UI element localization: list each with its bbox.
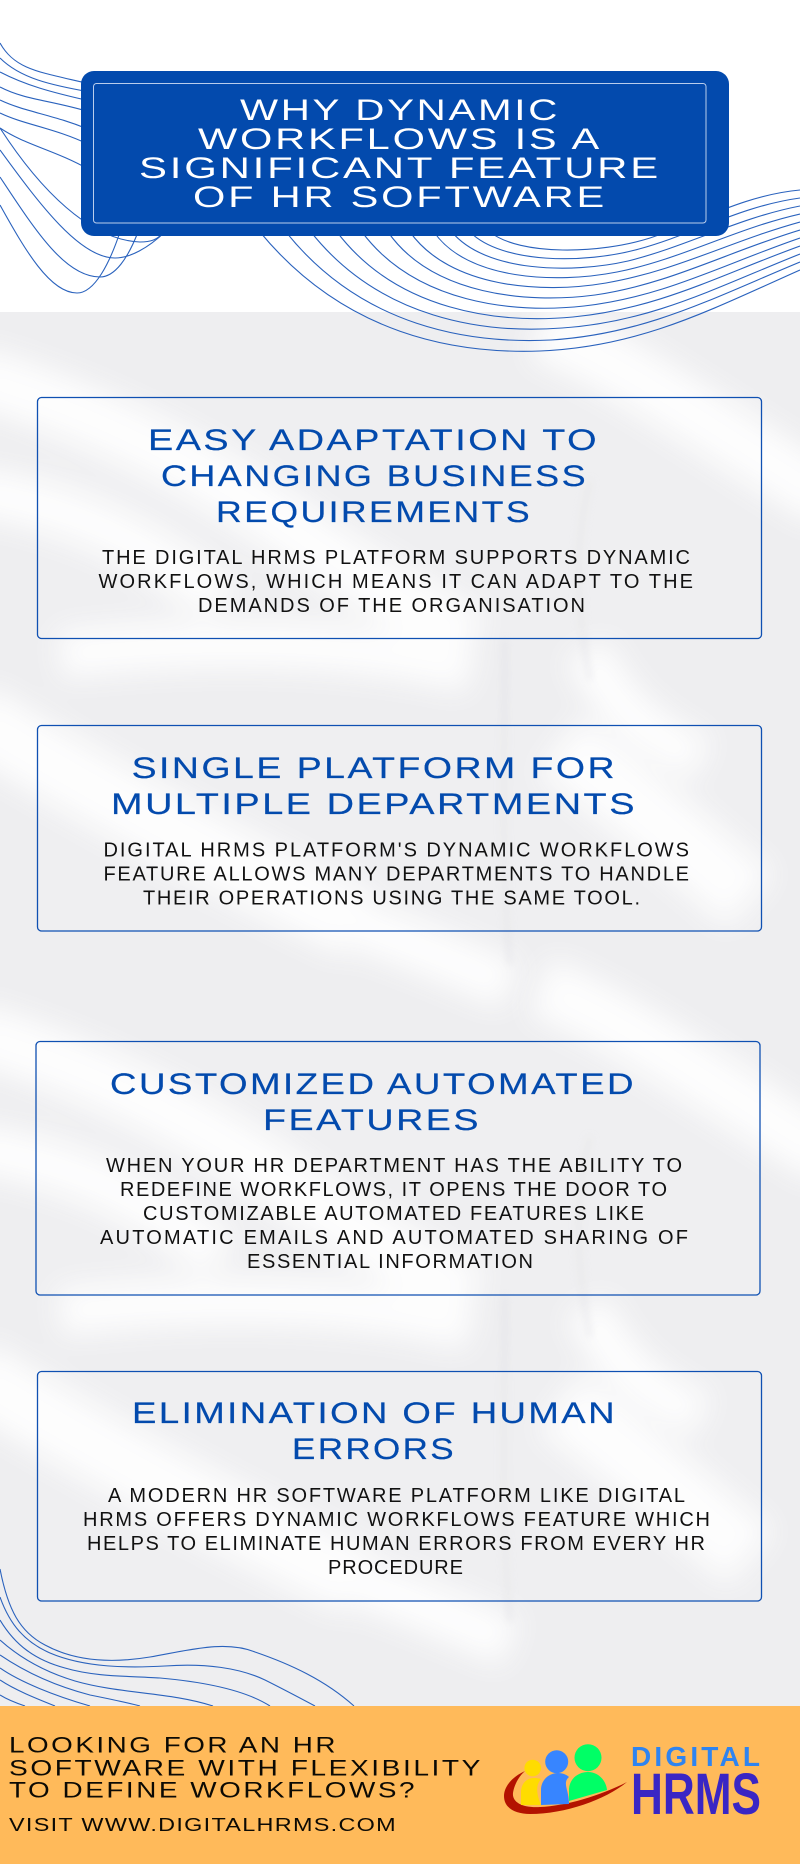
- body text: elimination of human errors: PROCEDURE: [328, 1557, 463, 1579]
- body text: elimination of human errors: [83, 1485, 710, 1579]
- heading: easy adaptation: EASY ADAPTATION TO: [148, 424, 599, 457]
- panel: elimination of human errors: [38, 1372, 762, 1601]
- heading: easy adaptation: REQUIREMENTS: [216, 496, 532, 529]
- body text: customized automated features: [100, 1155, 688, 1273]
- heading: elimination of human errors: ELIMINATION OF HUMAN: [132, 1397, 617, 1430]
- body text: elimination of human errors: HRMS OFFERS DYNAMIC WORKFLOWS FEATURE WHICH: [83, 1509, 710, 1531]
- footer call to action: LOOKING FOR AN HR: [9, 1732, 338, 1758]
- panel: single platform: [38, 726, 762, 931]
- logo wordmark: HRMS: [631, 1762, 761, 1827]
- title text: [139, 94, 661, 214]
- logo wordmark: [631, 1741, 761, 1827]
- body text: customized automated features: CUSTOMIZABLE AUTOMATED FEATURES LIKE: [143, 1203, 644, 1225]
- title text: SIGNIFICANT FEATURE: [139, 152, 661, 185]
- body text: easy adaptation: DEMANDS OF THE ORGANISATION: [198, 595, 585, 617]
- body text: customized automated features: ESSENTIAL INFORMATION: [247, 1251, 533, 1273]
- body text: single platform: THEIR OPERATIONS USING THE SAME TOOL.: [143, 888, 640, 910]
- footer call to action: TO DEFINE WORKFLOWS?: [9, 1778, 417, 1802]
- heading: elimination of human errors: [132, 1397, 617, 1466]
- logo wordmark: DIGITAL: [631, 1741, 760, 1772]
- heading: customized automated features: [110, 1068, 636, 1137]
- decorative wave lines: top right: [260, 190, 800, 351]
- footer call to action: SOFTWARE WITH FLEXIBILITY: [9, 1756, 483, 1780]
- footer band: [0, 1706, 800, 1864]
- heading: customized automated features: CUSTOMIZED AUTOMATED: [110, 1068, 636, 1101]
- heading: easy adaptation: CHANGING BUSINESS: [161, 460, 588, 493]
- background: white header: [0, 0, 800, 312]
- title text: WHY DYNAMIC: [240, 94, 560, 127]
- body text: single platform: DIGITAL HRMS PLATFORM'S DYNAMIC WORKFLOWS: [104, 840, 689, 862]
- footer website: VISIT WWW.DIGITALHRMS.COM: [9, 1815, 397, 1835]
- background: folded grey texture: [0, 312, 800, 1706]
- footer call to action: [9, 1732, 483, 1802]
- panel: easy adaptation: [38, 398, 762, 638]
- decorative wave lines: bottom left: [0, 1569, 354, 1706]
- panel: customized automated features: [36, 1042, 760, 1295]
- heading: customized automated features: FEATURES: [263, 1104, 481, 1137]
- title text: OF HR SOFTWARE: [193, 181, 607, 214]
- body text: elimination of human errors: A MODERN HR SOFTWARE PLATFORM LIKE DIGITAL: [108, 1485, 685, 1507]
- heading: single platform: SINGLE PLATFORM FOR: [132, 752, 617, 785]
- heading: single platform: MULTIPLE DEPARTMENTS: [111, 788, 637, 821]
- body text: elimination of human errors: HELPS TO ELIMINATE HUMAN ERRORS FROM EVERY HR: [87, 1533, 705, 1555]
- icon: digital hrms people logo: [504, 1744, 627, 1814]
- body text: single platform: FEATURE ALLOWS MANY DEPARTMENTS TO HANDLE: [104, 864, 689, 886]
- body text: customized automated features: REDEFINE WORKFLOWS, IT OPENS THE DOOR TO: [120, 1179, 667, 1201]
- body text: single platform: [104, 840, 689, 910]
- body text: customized automated features: AUTOMATIC EMAILS AND AUTOMATED SHARING OF: [100, 1227, 688, 1249]
- body text: customized automated features: WHEN YOUR HR DEPARTMENT HAS THE ABILITY TO: [106, 1155, 682, 1177]
- heading: single platform: [111, 752, 637, 821]
- body text: easy adaptation: THE DIGITAL HRMS PLATFORM SUPPORTS DYNAMIC: [102, 547, 690, 569]
- body text: easy adaptation: [98, 547, 693, 617]
- heading: easy adaptation: [148, 424, 599, 529]
- title banner: [81, 71, 729, 236]
- title text: WORKFLOWS IS A: [198, 123, 602, 156]
- body text: easy adaptation: WORKFLOWS, WHICH MEANS IT CAN ADAPT TO THE: [98, 571, 693, 593]
- decorative wave lines: top left: [0, 43, 165, 293]
- heading: elimination of human errors: ERRORS: [292, 1433, 456, 1466]
